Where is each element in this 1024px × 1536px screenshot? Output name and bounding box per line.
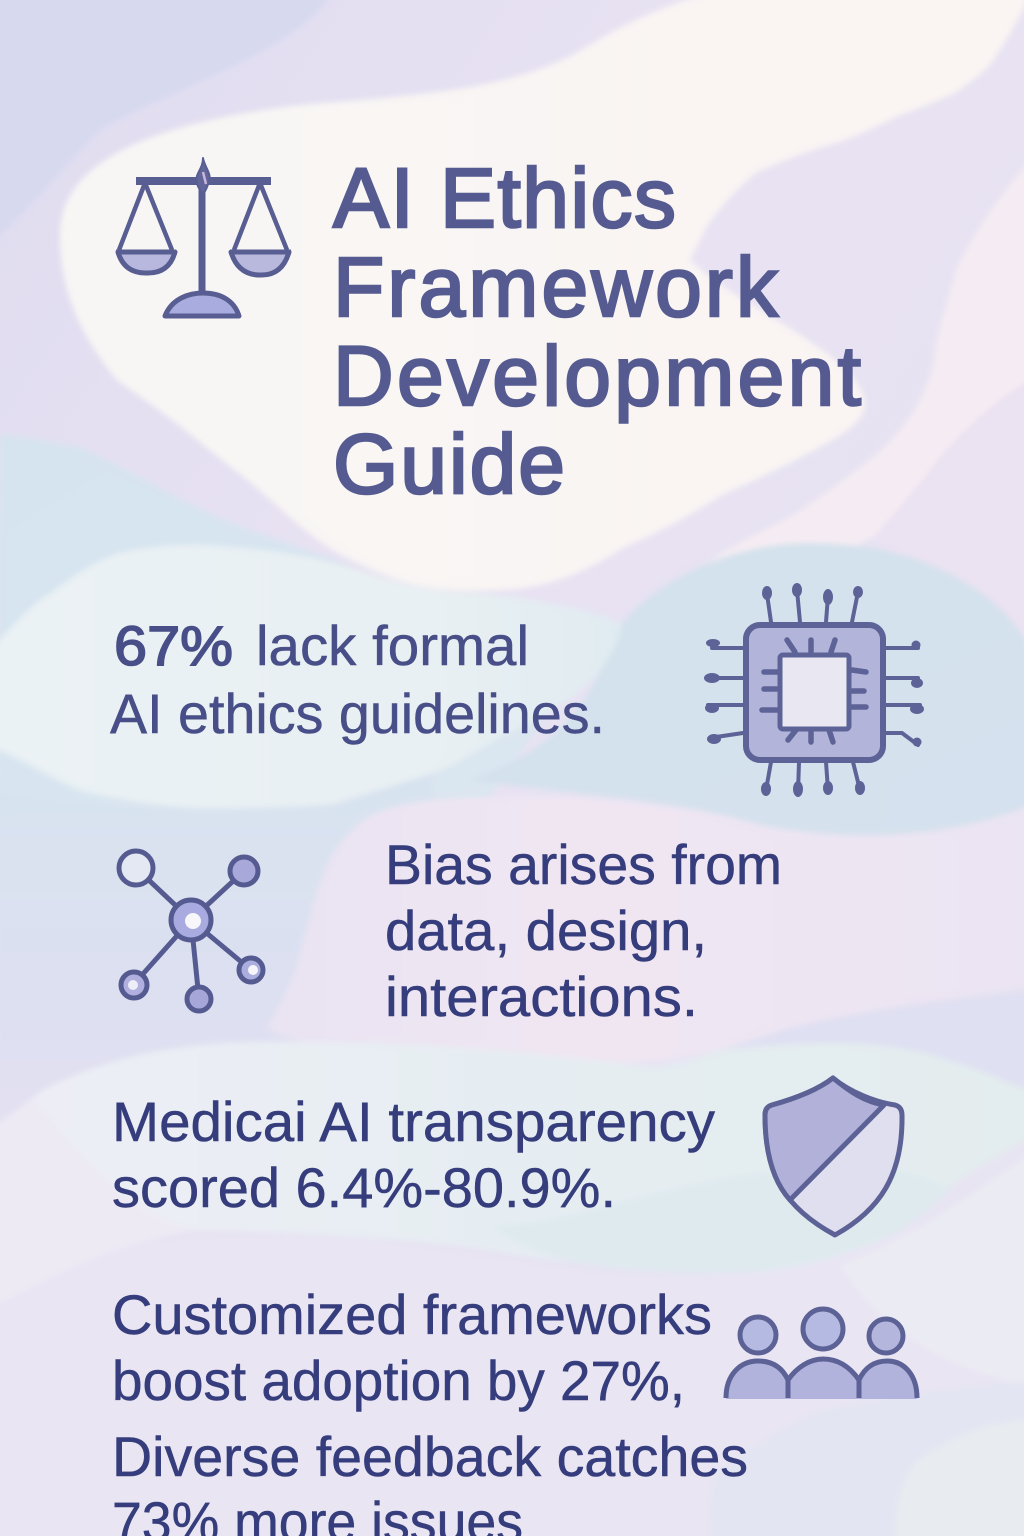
title: Framework: [333, 240, 779, 334]
title: AI Ethics: [333, 151, 676, 245]
text: customized frameworks: [112, 1283, 712, 1412]
text: 67% lack formal guidelines: AI ethics guidelines.: [110, 682, 605, 745]
text: bias: [385, 833, 782, 1028]
title: Guide: [333, 417, 565, 511]
text: bias: Bias arises from: [385, 833, 782, 896]
text: bias: data, design,: [385, 899, 707, 962]
text: 67% lack formal guidelines: lack formal: [256, 614, 529, 677]
text: diverse feedback: Diverse feedback catches: [112, 1425, 748, 1488]
text: diverse feedback: [112, 1425, 748, 1536]
text: medical AI transparency: scored 6.4%-80.9%.: [112, 1156, 616, 1219]
icon: balance scales: [116, 158, 291, 316]
text: 67% lack formal guidelines: 67%: [114, 614, 233, 677]
text: customized frameworks: Customized frameworks: [112, 1283, 712, 1346]
text: bias: interactions.: [385, 965, 698, 1028]
icon: microchip: [704, 583, 924, 797]
icon: people group: [726, 1309, 917, 1399]
title: Development: [333, 329, 861, 423]
icon: network nodes: [119, 851, 263, 1011]
text: medical AI transparency: [112, 1090, 715, 1219]
text: customized frameworks: boost adoption by 27%,: [112, 1349, 685, 1412]
text: 67% lack formal guidelines: [110, 614, 605, 745]
icon: shield: [765, 1078, 902, 1235]
title: [333, 151, 861, 511]
text: medical AI transparency: Medicai AI transparency: [112, 1090, 715, 1153]
